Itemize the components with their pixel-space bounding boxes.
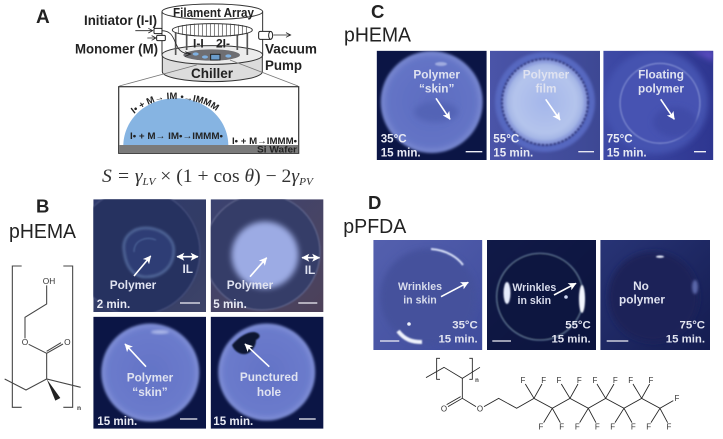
micrograph: 55C xyxy=(487,240,596,350)
pPFDA chemical structure: F xyxy=(675,394,680,403)
micrograph: 35C: 35°C xyxy=(452,319,478,331)
pHEMA chemical structure xyxy=(5,266,81,412)
spreading coefficient equation: PV xyxy=(298,176,314,188)
micrograph: 55C: 15 min. xyxy=(493,147,533,160)
reactor text labels: Chiller xyxy=(191,66,234,81)
pPFDA chemical structure: F xyxy=(539,422,544,431)
pPFDA chemical structure: F xyxy=(541,376,546,385)
zoomed droplet inset: Si Wafer xyxy=(257,144,298,154)
zoomed droplet inset: I• + M→ IM•→IMMM• xyxy=(130,131,224,142)
micrograph: 5 min: IL xyxy=(305,263,315,277)
pPFDA chemical structure: F xyxy=(646,422,651,431)
micrograph: 55C: Wrinkles xyxy=(512,282,556,294)
reactor text labels: Vacuum xyxy=(265,42,317,56)
micrograph: 75C: 75°C xyxy=(607,132,633,145)
micrograph: 75C: No xyxy=(633,279,649,293)
reactor text labels: Monomer (M) xyxy=(75,42,158,56)
spreading coefficient equation: S = γ xyxy=(102,166,141,187)
pPFDA chemical structure: F xyxy=(631,422,636,431)
pPFDA chemical structure: F xyxy=(649,376,654,385)
micrograph: 5 min: Polymer xyxy=(227,278,274,292)
micrograph: 15 min polymer skin: “skin” xyxy=(132,385,168,399)
pHEMA chemical structure: O xyxy=(22,337,29,347)
micrograph: 2 min: IL xyxy=(182,262,193,276)
zoomed droplet inset: I• + M→IMMM• xyxy=(232,136,298,147)
reactor chamber diagram xyxy=(119,4,298,86)
micrograph: 15 min polymer skin xyxy=(93,317,206,429)
micrograph: 35C: Polymer xyxy=(413,67,460,81)
micrograph: 15 min polymer skin: 15 min. xyxy=(97,415,137,428)
label A: A xyxy=(36,7,50,28)
reactor text labels xyxy=(75,6,317,81)
spreading coefficient equation: θ) − 2γ xyxy=(245,166,299,187)
micrograph: 55C: Polymer xyxy=(523,67,570,81)
micrograph: 35C: 35°C xyxy=(381,132,407,145)
micrograph: 35C: 15 min. xyxy=(438,334,478,346)
label B: B xyxy=(36,196,49,216)
panel A: iCVD reactor schematic xyxy=(36,4,317,188)
heading pHEMA: pHEMA xyxy=(344,25,412,47)
micrograph: 15 min punctured hole: hole xyxy=(257,385,282,399)
pHEMA chemical structure: n xyxy=(77,405,81,412)
micrograph: 55C xyxy=(490,51,600,160)
pHEMA chemical structure: OH xyxy=(43,276,55,286)
pPFDA chemical structure: F xyxy=(628,376,633,385)
reactor text labels: I-I xyxy=(193,36,204,50)
label C: C xyxy=(371,1,384,22)
micrograph: 75C xyxy=(600,240,710,350)
micrograph: 15 min punctured hole: 15 min. xyxy=(213,415,253,428)
micrograph: 2 min xyxy=(93,199,206,312)
micrograph: 2 min: Polymer xyxy=(110,278,157,292)
spreading coefficient equation: × (1 + cos xyxy=(155,166,245,187)
reactor text labels: Initiator (I-I) xyxy=(84,13,157,28)
micrograph: 55C: 15 min. xyxy=(551,334,591,346)
micrograph: 15 min punctured hole xyxy=(211,317,323,429)
micrograph: 75C: 15 min. xyxy=(666,334,705,346)
micrograph: 75C: 75°C xyxy=(680,319,705,331)
pPFDA chemical structure: F xyxy=(595,422,600,431)
pPFDA chemical structure: F xyxy=(559,422,564,431)
micrograph: 15 min punctured hole: Punctured xyxy=(240,370,298,384)
panel D: pPFDA temperature series xyxy=(343,192,710,431)
micrograph: 75C: Floating xyxy=(638,67,684,81)
heading pHEMA: pHEMA xyxy=(9,221,77,243)
pPFDA chemical structure: F xyxy=(593,376,598,385)
pHEMA chemical structure: O xyxy=(64,337,71,347)
pPFDA chemical structure: F xyxy=(521,376,526,385)
label D: D xyxy=(368,192,381,213)
pPFDA chemical structure: n xyxy=(475,378,479,384)
panel B: pHEMA time series xyxy=(5,189,323,429)
pPFDA chemical structure: F xyxy=(575,422,580,431)
micrograph: 75C: polymer xyxy=(638,81,684,95)
panel C: pHEMA temperature series xyxy=(344,1,714,160)
reactor text labels: 2I- xyxy=(216,36,230,50)
micrograph: 35C xyxy=(373,240,482,350)
micrograph: 35C: in skin xyxy=(403,294,437,306)
micrograph: 5 min: 5 min. xyxy=(213,298,247,311)
pPFDA chemical structure: F xyxy=(557,376,562,385)
reactor text labels: Pump xyxy=(265,58,302,73)
micrograph: 55C: 55°C xyxy=(493,132,520,145)
pPFDA chemical structure: F xyxy=(667,422,672,431)
micrograph: 75C: 15 min. xyxy=(607,147,647,160)
micrograph: 55C: film xyxy=(536,81,556,95)
micrograph: 15 min polymer skin: Polymer xyxy=(127,371,174,385)
pPFDA chemical structure: F xyxy=(613,376,618,385)
micrograph: 55C: 55°C xyxy=(565,319,591,331)
micrograph: 75C xyxy=(603,50,714,160)
pPFDA chemical structure: O xyxy=(441,405,447,414)
pPFDA chemical structure: O xyxy=(477,405,483,414)
micrograph: 35C: 15 min. xyxy=(381,147,421,160)
micrograph: 5 min xyxy=(204,194,323,312)
micrograph: 35C: “skin” xyxy=(419,81,455,95)
micrograph: 75C: polymer xyxy=(619,292,665,306)
heading pPFDA: pPFDA xyxy=(343,216,407,238)
pPFDA chemical structure: F xyxy=(610,422,615,431)
micrograph: 55C: in skin xyxy=(518,295,551,307)
zoomed droplet inset: I• + M→ IM •→IMMM xyxy=(130,92,220,114)
reactor text labels: Filament Array xyxy=(173,6,254,20)
spreading coefficient equation: LV xyxy=(142,176,157,188)
pPFDA chemical structure xyxy=(426,358,680,431)
micrograph: 2 min: 2 min. xyxy=(97,298,130,311)
micrograph: 35C xyxy=(377,51,487,160)
micrograph: 35C: Wrinkles xyxy=(398,281,442,293)
pPFDA chemical structure: F xyxy=(577,376,582,385)
zoomed droplet inset xyxy=(118,86,300,154)
